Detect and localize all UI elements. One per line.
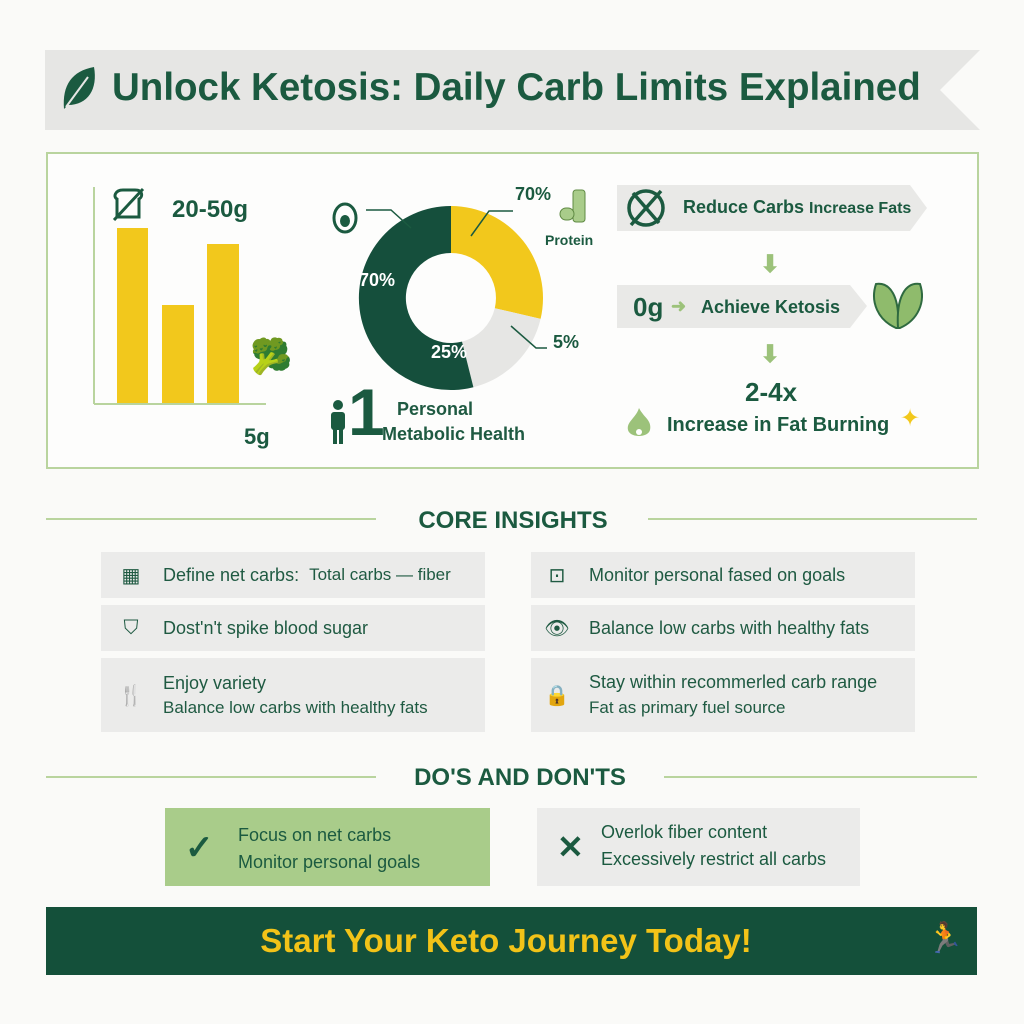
card: net carbs xyxy=(101,552,485,598)
card: enjoy variety: Enjoy variety xyxy=(163,672,266,692)
label: protein: Protein xyxy=(545,232,593,248)
text: personal metabolic health: Metabolic Health xyxy=(382,424,525,444)
card: enjoy variety xyxy=(101,658,485,732)
icon: person with 1: 1 xyxy=(348,375,385,449)
card: enjoy variety: 🍴 xyxy=(119,684,143,706)
card: net carbs: Define net carbs: xyxy=(163,564,299,584)
icon: runner: 🏃 xyxy=(926,922,963,955)
panel: dont: ✕ xyxy=(557,829,584,865)
panel: do xyxy=(165,808,490,886)
heading: core insights: CORE INSIGHTS xyxy=(418,507,608,534)
flow: reduce carbs xyxy=(617,185,927,231)
card: monitor: Monitor personal fased on goals xyxy=(589,564,845,584)
panel: do: Focus on net carbs xyxy=(238,825,391,845)
card: balance xyxy=(531,605,915,651)
title: Unlock Ketosis: Daily Carb Limits Explained xyxy=(112,66,921,109)
card: balance: 👁 xyxy=(544,618,570,640)
footer banner xyxy=(46,907,977,975)
icon: flame xyxy=(628,408,650,436)
card: stay within range: Stay within recommerled carb range xyxy=(589,672,877,692)
label: 20-50g: 20-50g xyxy=(172,196,248,223)
panel: stats xyxy=(46,152,979,469)
icon: broccoli: 🥦 xyxy=(250,338,292,376)
title banner xyxy=(45,50,980,130)
text: personal metabolic health xyxy=(382,399,525,444)
text: personal metabolic health: Personal xyxy=(397,399,473,419)
card: blood sugar xyxy=(101,605,485,651)
donut chart xyxy=(358,206,547,390)
icon: sparkle: ✦ xyxy=(900,405,920,432)
panel: dont: Overlok fiber content xyxy=(601,822,767,842)
icon: spinach leaves xyxy=(872,282,923,329)
card: monitor xyxy=(531,552,915,598)
icon: person with 1 xyxy=(331,375,385,449)
card: stay within range: Fat as primary fuel source xyxy=(589,698,786,717)
icon: no bread xyxy=(113,188,144,221)
label: 5%: 5% xyxy=(553,332,579,352)
panel: do: Monitor personal goals xyxy=(238,852,420,872)
stat: 2-4x: 2-4x xyxy=(745,377,797,407)
donut chart: 25% xyxy=(431,342,467,362)
arrow down 1: ⬇ xyxy=(760,251,780,278)
icon: avocado xyxy=(332,202,358,234)
flow: reduce carbs: Reduce Carbs Increase Fats xyxy=(683,197,911,217)
card: blood sugar: Dost'n't spike blood sugar xyxy=(163,618,368,638)
donut chart: 70% xyxy=(359,270,395,290)
heading: dos and donts: DO'S AND DON'TS xyxy=(414,764,626,791)
card: enjoy variety: Balance low carbs with healthy fats xyxy=(163,698,428,716)
footer banner: Start Your Keto Journey Today! xyxy=(260,922,752,959)
icon: protein bottles xyxy=(560,190,586,222)
panel: dont: Excessively restrict all carbs xyxy=(601,849,826,869)
arrow down 2: ⬇ xyxy=(760,341,780,368)
card: monitor: ⊡ xyxy=(549,564,565,586)
card: stay within range xyxy=(531,658,915,732)
label: 5g: 5g xyxy=(244,424,270,449)
panel: dont xyxy=(537,808,860,886)
flow: achieve ketosis: Achieve Ketosis xyxy=(701,297,840,317)
panel: do: ✓ xyxy=(185,829,214,867)
bar chart xyxy=(93,187,266,405)
card: balance: Balance low carbs with healthy fats xyxy=(589,618,869,638)
flow: achieve ketosis: ➜ xyxy=(671,296,686,316)
icon: leaf xyxy=(64,67,95,109)
label: 70% top: 70% xyxy=(515,184,551,204)
flow: achieve ketosis xyxy=(617,285,867,328)
card: blood sugar: ⛉ xyxy=(124,616,138,638)
flow: achieve ketosis: 0g xyxy=(633,292,663,322)
card: stay within range: 🔒 xyxy=(545,684,569,706)
text: increase in fat burning: Increase in Fat Burning xyxy=(667,414,889,436)
card: net carbs: ▦ xyxy=(122,564,140,586)
card: net carbs: Total carbs — fiber xyxy=(309,565,451,584)
